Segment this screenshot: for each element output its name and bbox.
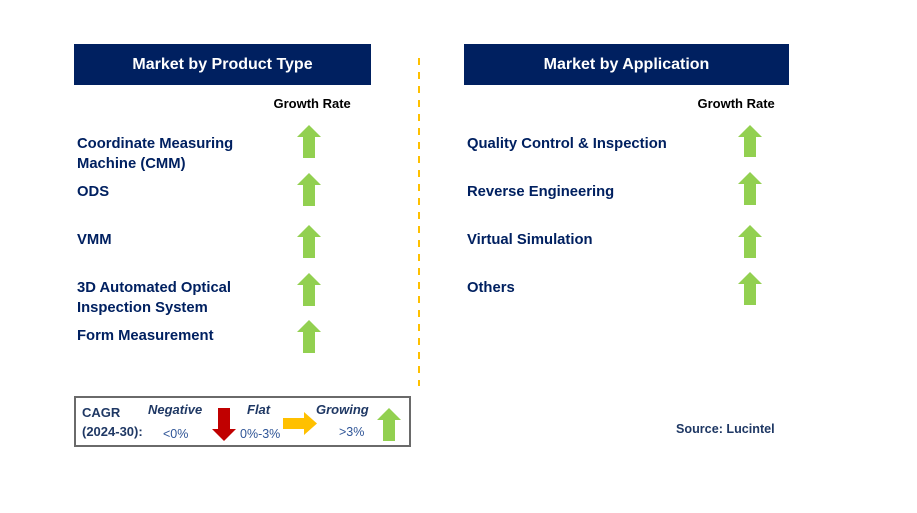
product label: 3D AOI <box>77 280 231 316</box>
header: market by application: Market by Application <box>544 56 709 73</box>
legend title <box>82 405 143 439</box>
icon: green up arrow form measurement <box>297 320 321 353</box>
product label: ODS: ODS <box>77 184 109 200</box>
product label: form measurement: Form Measurement <box>77 328 214 344</box>
legend negative heading: Negative <box>148 402 202 417</box>
source note: Source: Lucintel <box>676 422 775 436</box>
icon: green up arrow others <box>738 272 762 305</box>
icon: green up arrow VMM <box>297 225 321 258</box>
legend growing value: >3% <box>339 425 364 439</box>
icon: green up arrow 3D AOI <box>297 273 321 306</box>
icon: green up arrow CMM <box>297 125 321 158</box>
product label: CMM: Coordinate Measuring <box>77 136 233 152</box>
legend negative value: <0% <box>163 427 188 441</box>
growth rate label left: Growth Rate <box>274 96 351 111</box>
legend flat heading: Flat <box>247 402 270 417</box>
icon: green up arrow ODS <box>297 173 321 206</box>
center dashed divider <box>418 58 420 386</box>
growth rate label right: Growth Rate <box>698 96 775 111</box>
legend title: CAGR <box>82 405 120 420</box>
legend: CAGR <box>74 396 411 447</box>
legend growing heading: Growing <box>316 402 369 417</box>
application label: others: Others <box>467 280 515 296</box>
icon: green up arrow quality control <box>738 125 762 157</box>
product label: CMM <box>77 136 233 172</box>
application label: reverse engineering: Reverse Engineering <box>467 184 614 200</box>
legend flat value: 0%-3% <box>240 427 280 441</box>
header: market by product type: Market by Product Type <box>132 56 313 73</box>
icon: green up arrow virtual simulation <box>738 225 762 258</box>
product label: VMM: VMM <box>77 232 112 248</box>
header: market by application <box>464 44 789 85</box>
product label: 3D AOI: Inspection System <box>77 300 208 316</box>
product label: 3D AOI: 3D Automated Optical <box>77 280 231 296</box>
header: market by product type <box>74 44 371 85</box>
icon: green up arrow reverse engineering <box>738 172 762 205</box>
icon: yellow right arrow <box>283 412 317 435</box>
application label: virtual simulation: Virtual Simulation <box>467 232 593 248</box>
application label: quality control: Quality Control & Inspection <box>467 136 667 152</box>
product label: CMM: Machine (CMM) <box>77 156 186 172</box>
legend title: (2024-30): <box>82 424 143 439</box>
icon: red down arrow <box>212 408 236 441</box>
icon: green up arrow <box>377 408 401 441</box>
